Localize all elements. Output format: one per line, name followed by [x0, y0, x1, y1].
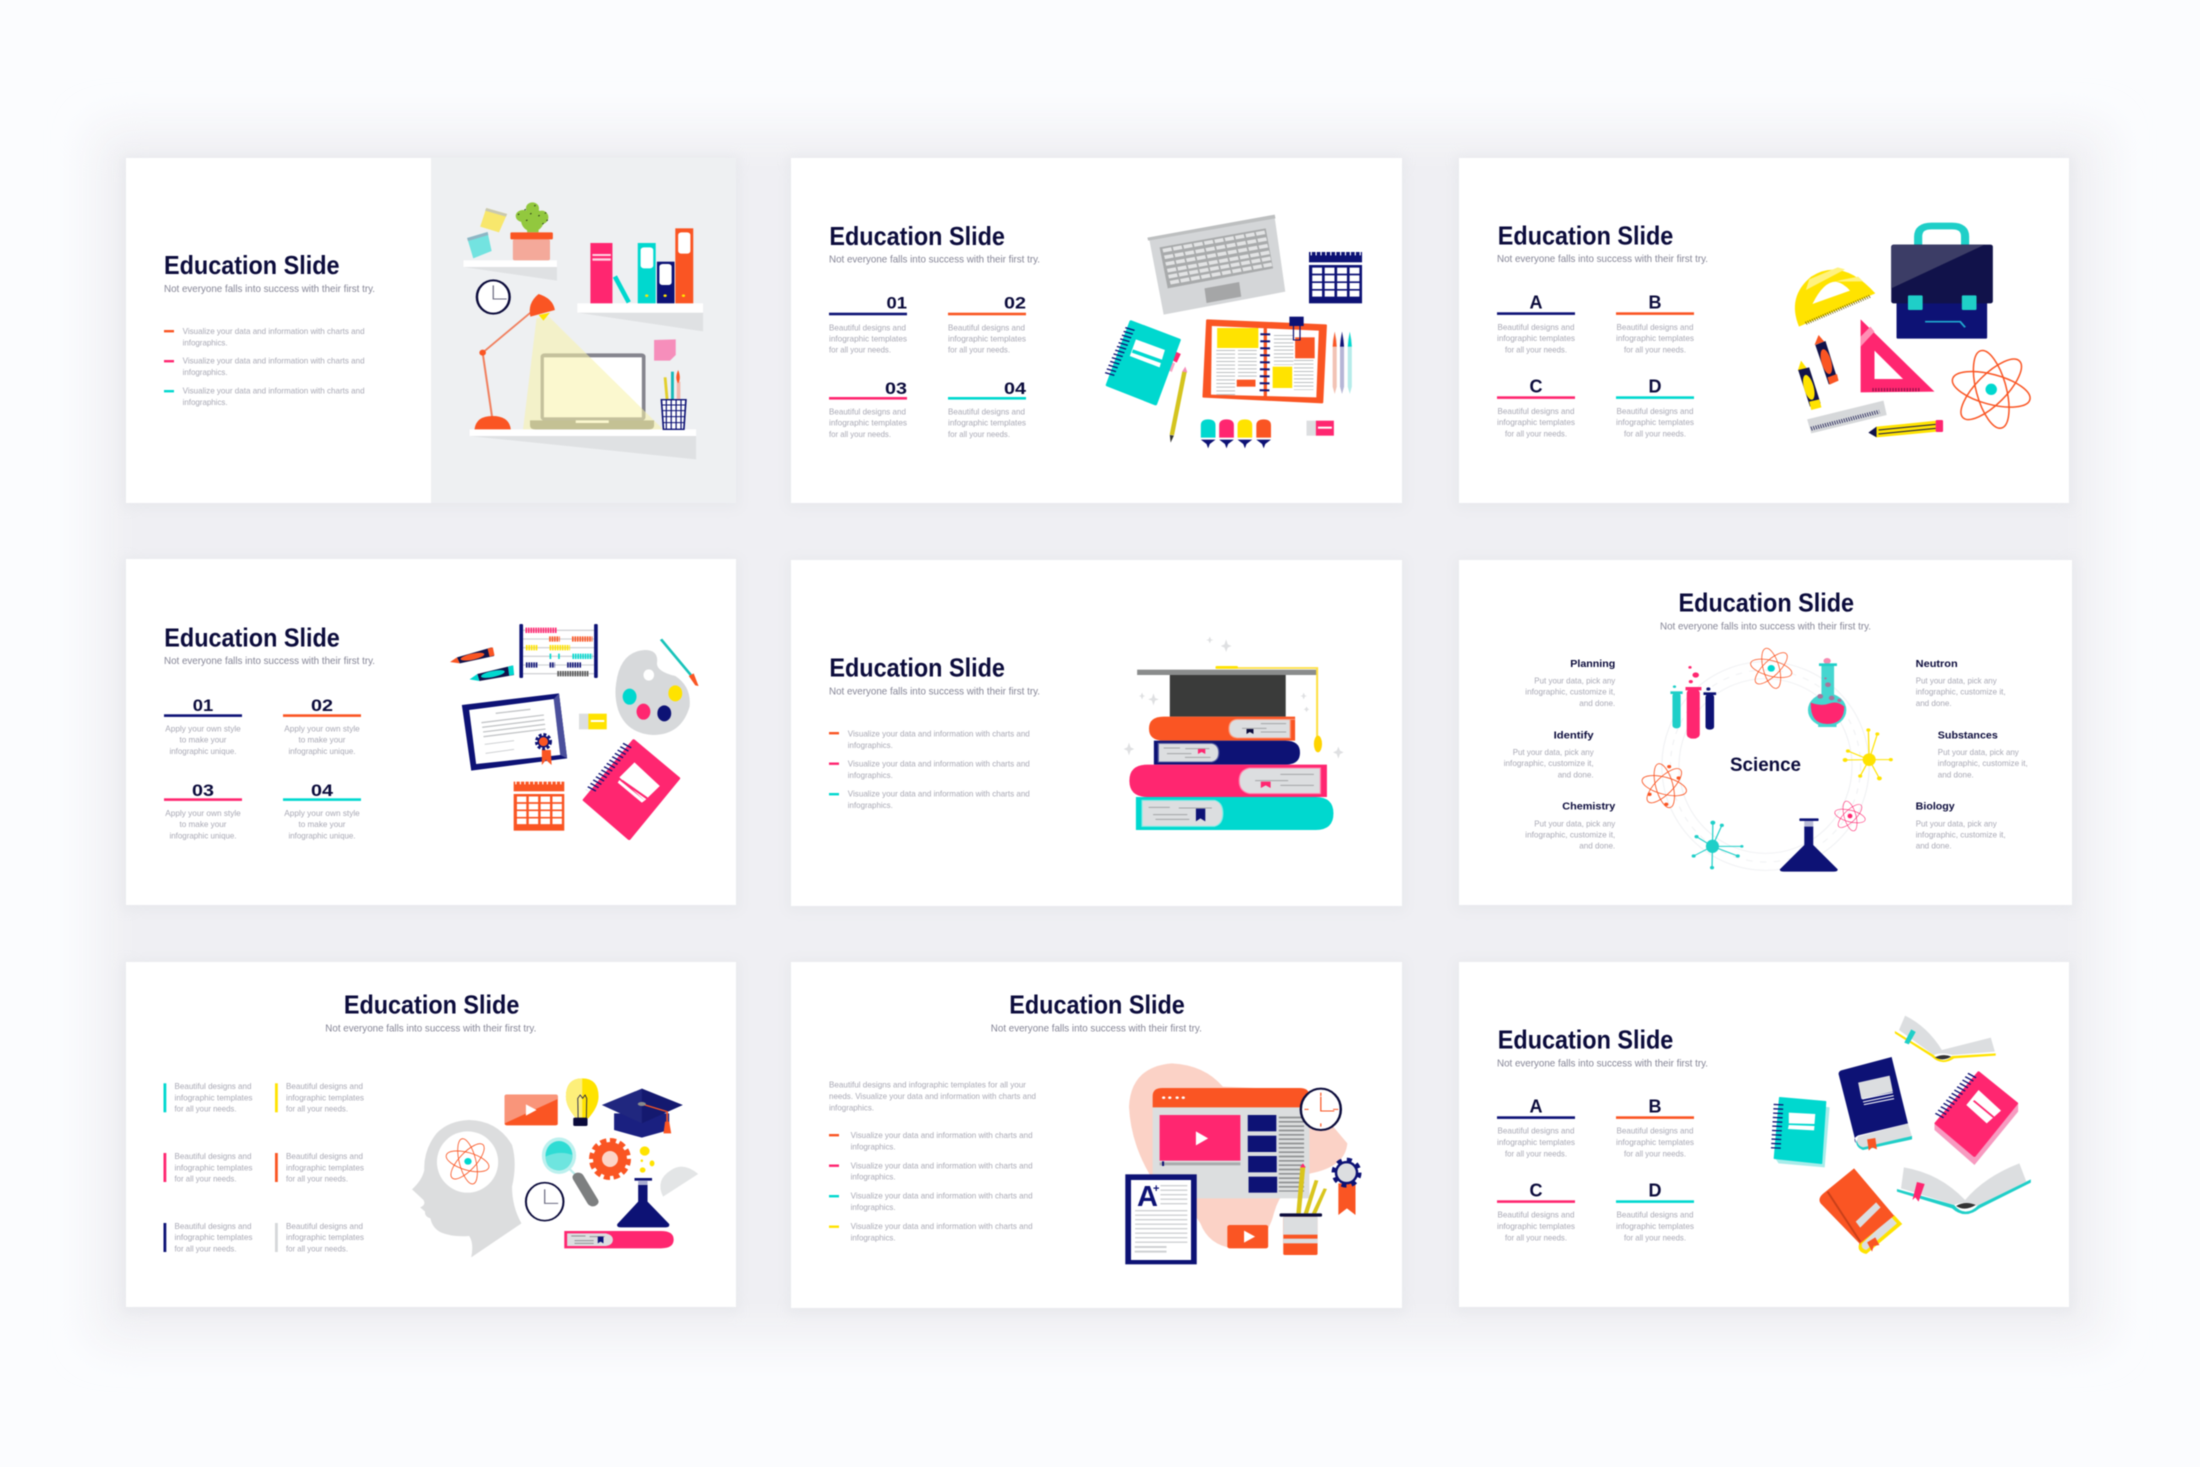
panel: slide 2 study desk	[791, 158, 1402, 503]
text blocks with colour bars: for all your needs.	[286, 1104, 348, 1114]
item 04	[283, 781, 361, 840]
item 02	[948, 293, 1026, 355]
icon: eraser	[1307, 421, 1334, 436]
bullet list: infographics.	[848, 800, 893, 810]
icon: calendar	[513, 782, 565, 831]
panel: slide 4 classroom items	[126, 559, 736, 905]
illustration: school bag and geometry tools	[1795, 226, 2034, 437]
text blocks with colour bars: for all your needs.	[174, 1104, 236, 1114]
item 02: Beautiful designs and	[948, 322, 1025, 332]
illustration: head with knowledge icons	[412, 1078, 698, 1257]
text blocks with colour bars: Beautiful designs and	[286, 1081, 363, 1091]
icon: orange atom with electrons	[1640, 762, 1689, 810]
subtitle: Not everyone falls into success with their first try.	[1660, 621, 1871, 633]
icon: pink atom	[1833, 800, 1867, 832]
icon: pencil cup	[1280, 1163, 1327, 1255]
subtitle: Not everyone falls into success with their first try.	[325, 1022, 536, 1034]
item A: Beautiful designs and	[1498, 1126, 1575, 1136]
bullet list	[829, 1130, 1033, 1242]
icon: protractor	[660, 1167, 698, 1197]
icon: clock	[1301, 1089, 1341, 1130]
item A: for all your needs.	[1505, 344, 1567, 354]
icon: eraser	[579, 714, 607, 729]
panel: slide 3 school bag	[1459, 158, 2069, 503]
title: Education Slide	[1498, 1024, 1673, 1054]
item 03: infographic unique.	[170, 830, 236, 840]
label: Chemistry: Put your data, pick any	[1534, 818, 1616, 828]
subtitle: Not everyone falls into success with their first try.	[991, 1022, 1202, 1034]
item 01: infographic templates	[829, 333, 907, 343]
text blocks with colour bars: infographic templates	[286, 1232, 364, 1242]
icon: conical flask	[617, 1178, 669, 1227]
label: Identify: Identify	[1554, 729, 1594, 741]
icon label: A plus: A	[1137, 1181, 1158, 1213]
item D	[1616, 376, 1694, 438]
panel: slide 6 science cycle	[1459, 560, 2072, 905]
item 04: 04	[1004, 379, 1027, 398]
icon: gear	[592, 1141, 628, 1177]
item C	[1497, 1180, 1575, 1242]
icon: light bulb	[566, 1078, 599, 1126]
bullet list: Visualize your data and information with charts and	[851, 1221, 1033, 1231]
item 01: to make your	[180, 735, 227, 745]
icon: crayons	[1798, 335, 1839, 410]
label: Neutron	[1916, 658, 2006, 708]
bullet list: infographics.	[851, 1141, 896, 1151]
item B: for all your needs.	[1624, 344, 1686, 354]
icon: graded paper A+	[1125, 1174, 1197, 1264]
item 02: 02	[1004, 293, 1026, 312]
icon: clock	[526, 1183, 563, 1221]
text blocks with colour bars: infographic templates	[286, 1092, 364, 1102]
item 01: Apply your own style	[165, 724, 241, 734]
text blocks with colour bars: Beautiful designs and	[286, 1151, 363, 1161]
label: Substances: Put your data, pick any	[1938, 747, 2020, 757]
icon: laptop	[530, 353, 654, 429]
subtitle: Not everyone falls into success with their first try.	[829, 686, 1040, 698]
item C: Beautiful designs and	[1498, 1210, 1575, 1220]
icon: highlighters	[1201, 419, 1271, 448]
item D: Beautiful designs and	[1616, 1210, 1694, 1220]
label: Substances: infographic, customize it,	[1938, 758, 2028, 768]
icon: ruler	[1807, 401, 1887, 433]
icon: paint palette	[615, 639, 699, 735]
item B: infographic templates	[1616, 333, 1694, 343]
title: Education Slide	[1009, 989, 1185, 1019]
label: Identify: and done.	[1558, 769, 1594, 779]
item 01: 01	[193, 696, 213, 715]
text blocks with colour bars: Beautiful designs and	[174, 1151, 252, 1161]
title: Education Slide	[829, 653, 1005, 683]
subtitle: Not everyone falls into success with their first try.	[164, 655, 375, 667]
item 03	[829, 379, 907, 439]
item 02: Apply your own style	[284, 724, 360, 734]
item D: for all your needs.	[1624, 1232, 1686, 1242]
item 04: Apply your own style	[284, 808, 360, 818]
item 01: 01	[886, 293, 907, 312]
item 03: 03	[192, 781, 214, 800]
item 04: for all your needs.	[948, 429, 1010, 439]
icon: teal notebook	[1774, 1098, 1830, 1167]
icon label: A plus: +	[1153, 1183, 1159, 1195]
icon: open book teal	[1897, 1163, 2031, 1214]
item C: C	[1530, 1180, 1542, 1200]
icon: open planner	[1204, 317, 1326, 402]
bullet list: infographics.	[851, 1232, 896, 1242]
icon: school bag	[1891, 226, 1993, 339]
icon: video button	[1227, 1225, 1268, 1248]
label: Neutron: Put your data, pick any	[1916, 676, 1997, 686]
icon: bubbles	[640, 1146, 654, 1173]
icon: desk lamp	[474, 294, 663, 429]
label: Neutron: and done.	[1916, 698, 1952, 708]
bullet list: Visualize your data and information with charts and	[851, 1160, 1033, 1170]
label: Substances: and done.	[1938, 769, 1974, 779]
item A: infographic templates	[1497, 1137, 1575, 1147]
item 04: infographic unique.	[288, 830, 356, 840]
label: Biology: Biology	[1916, 801, 1955, 813]
item 03	[164, 781, 242, 840]
label: Biology	[1916, 801, 2006, 851]
icon: conical flask	[1780, 818, 1838, 872]
item B	[1616, 292, 1694, 354]
bullet list: Visualize your data and information with charts and	[183, 356, 365, 366]
item B	[1616, 1096, 1694, 1158]
item D: for all your needs.	[1624, 428, 1686, 438]
label: Substances	[1938, 729, 2028, 779]
panel: slide 8 online learning	[791, 962, 1402, 1308]
icon: abacus	[519, 624, 598, 678]
bullet list: Visualize your data and information with charts and	[183, 386, 365, 396]
icon: atom top	[1749, 646, 1794, 690]
bullet list: infographics.	[851, 1202, 896, 1212]
label: Chemistry: and done.	[1579, 841, 1615, 851]
item 01: infographic unique.	[170, 746, 236, 756]
bullet list: infographics.	[848, 770, 893, 780]
icon: navy book	[1154, 741, 1300, 765]
item 01	[164, 696, 242, 756]
text blocks with colour bars: for all your needs.	[174, 1174, 236, 1184]
icon: video card	[505, 1095, 558, 1125]
item B: Beautiful designs and	[1616, 322, 1694, 332]
panel: slide 7 head and ideas	[126, 962, 736, 1307]
item D: D	[1648, 1180, 1662, 1200]
icon: open book yellow	[1895, 1016, 1996, 1062]
icon: teal molecule	[1692, 821, 1743, 869]
illustration: scattered books	[1774, 1016, 2031, 1254]
illustration: book stack with graduation cap	[1124, 637, 1344, 830]
bullet list: Visualize your data and information with charts and	[848, 729, 1030, 739]
label: Neutron: infographic, customize it,	[1916, 687, 2006, 697]
bullet list: infographics.	[183, 397, 228, 407]
icon: crayons	[450, 647, 514, 681]
item 02	[283, 696, 361, 756]
item C: infographic templates	[1497, 1221, 1575, 1231]
icon: round flask	[1808, 658, 1846, 727]
item 03: Apply your own style	[165, 808, 241, 818]
title: Education Slide	[164, 622, 340, 652]
label: Planning: Planning	[1570, 658, 1615, 670]
bullet list: Visualize your data and information with charts and	[848, 759, 1030, 769]
item A: infographic templates	[1497, 333, 1575, 343]
icon: award ribbon	[1334, 1160, 1360, 1215]
item 04	[948, 379, 1027, 439]
item 02: infographic templates	[948, 333, 1026, 343]
icon: navy book	[1839, 1057, 1912, 1151]
icon: atom	[1949, 347, 2034, 432]
intro paragraph: infographics.	[829, 1102, 874, 1112]
item 04: infographic templates	[948, 418, 1026, 428]
bullet list: Visualize your data and information with charts and	[851, 1130, 1033, 1140]
item 01	[829, 293, 907, 355]
item 02: to make your	[298, 735, 346, 745]
icon: pencil cup	[661, 370, 686, 429]
item B: B	[1648, 1096, 1662, 1116]
text blocks with colour bars: Beautiful designs and	[174, 1221, 252, 1231]
icon: yellow molecule	[1843, 728, 1893, 780]
text blocks with colour bars: infographic templates	[174, 1092, 252, 1102]
label: Biology: and done.	[1916, 841, 1952, 851]
icon: pink notebook	[1934, 1072, 2018, 1165]
subtitle: Not everyone falls into success with their first try.	[164, 283, 375, 295]
ring	[1662, 662, 1869, 870]
item 01: for all your needs.	[829, 345, 891, 355]
text blocks with colour bars: for all your needs.	[286, 1243, 348, 1253]
item 03: for all your needs.	[829, 429, 891, 439]
text blocks with colour bars: Beautiful designs and	[174, 1081, 252, 1091]
illustration: video lessons	[1125, 1063, 1360, 1264]
text blocks with colour bars: for all your needs.	[174, 1243, 236, 1253]
icon: set square	[1861, 319, 1934, 392]
icon: browser window	[1153, 1088, 1309, 1198]
text blocks with colour bars: infographic templates	[174, 1232, 252, 1242]
item A: for all your needs.	[1505, 1148, 1567, 1158]
centre label: Science	[1730, 754, 1801, 776]
icon: top shelf with plant and notes	[463, 202, 557, 281]
intro paragraph	[829, 1080, 1036, 1112]
icon: calendar	[1308, 252, 1363, 303]
item 03: 03	[885, 379, 907, 398]
icon: orange book	[1819, 1168, 1902, 1254]
icon: framed certificate	[462, 693, 567, 771]
title: Education Slide	[829, 221, 1005, 251]
item B: B	[1648, 292, 1662, 312]
icon: sticky note	[654, 339, 676, 361]
bullet list: infographics.	[183, 337, 228, 347]
item D: infographic templates	[1616, 417, 1694, 427]
subtitle: Not everyone falls into success with their first try.	[1497, 1057, 1708, 1069]
bullet list: Visualize your data and information with charts and	[851, 1191, 1033, 1201]
item C: C	[1530, 376, 1542, 396]
label: Identify: Put your data, pick any	[1513, 747, 1594, 757]
icon: binders on shelf	[577, 228, 703, 331]
label: Planning	[1525, 658, 1616, 708]
bullet list: Visualize your data and information with charts and	[183, 326, 365, 336]
item A	[1497, 292, 1575, 354]
icon: protractor	[1795, 267, 1875, 327]
label: Planning: and done.	[1579, 698, 1615, 708]
item A: A	[1530, 1096, 1542, 1116]
item B: Beautiful designs and	[1616, 1126, 1694, 1136]
item 04: to make your	[298, 819, 346, 829]
label: Neutron: Neutron	[1916, 658, 1958, 670]
item 03: Beautiful designs and	[829, 407, 906, 417]
label: Chemistry: Chemistry	[1562, 801, 1615, 813]
label: Chemistry	[1525, 801, 1616, 851]
bullet list: infographics.	[851, 1172, 896, 1182]
icon: book	[564, 1231, 674, 1248]
icon: test tubes	[1670, 666, 1716, 739]
bullet list	[164, 326, 365, 407]
icon: pink book	[1129, 765, 1327, 797]
icon: teal notebook	[1107, 322, 1181, 404]
item 03: to make your	[180, 819, 227, 829]
icon: pencil	[1868, 420, 1943, 437]
illustration: laptop, planner and stationery	[1107, 215, 1363, 448]
background blob	[1129, 1063, 1347, 1248]
icon: pens	[1333, 332, 1352, 394]
item C: for all your needs.	[1505, 1232, 1567, 1242]
item 02: 02	[311, 696, 333, 715]
label: Substances: Substances	[1938, 729, 1998, 741]
icon: magnifying glass	[542, 1137, 593, 1202]
panel: slide 5 books and graduation cap	[791, 560, 1402, 906]
item D: Beautiful designs and	[1616, 406, 1694, 416]
item B: infographic templates	[1616, 1137, 1694, 1147]
intro paragraph: needs. Visualize your data and information with charts and	[829, 1091, 1036, 1101]
icon: graduation cap	[602, 1089, 683, 1138]
text blocks with colour bars: Beautiful designs and	[286, 1221, 363, 1231]
icon: bottom shelf	[470, 429, 696, 459]
title: Education Slide	[1498, 220, 1673, 250]
subtitle: Not everyone falls into success with their first try.	[1497, 253, 1708, 265]
item C	[1497, 376, 1575, 438]
item 04: Beautiful designs and	[948, 407, 1025, 417]
item 02: for all your needs.	[948, 345, 1010, 355]
item D: infographic templates	[1616, 1221, 1694, 1231]
icon: orange book	[1149, 717, 1295, 741]
bullet list: Visualize your data and information with charts and	[848, 789, 1030, 799]
bullet list: infographics.	[183, 367, 228, 377]
item D: D	[1648, 376, 1662, 396]
subtitle: Not everyone falls into success with their first try.	[829, 253, 1040, 265]
label: Planning: Put your data, pick any	[1534, 676, 1616, 686]
icon: pencil	[1170, 367, 1187, 443]
item 04: 04	[311, 781, 334, 800]
bullet list	[829, 729, 1030, 810]
text blocks with colour bars: infographic templates	[286, 1162, 364, 1172]
title: Education Slide	[1679, 587, 1854, 617]
icon: wall clock	[477, 280, 510, 314]
illustration: desk with lamp, laptop and shelves	[463, 202, 703, 459]
item 02: infographic unique.	[288, 746, 356, 756]
item 03: infographic templates	[829, 418, 907, 428]
label: Planning: infographic, customize it,	[1525, 687, 1615, 697]
title: Education Slide	[344, 989, 519, 1019]
icon: sparkles	[1124, 637, 1344, 759]
icon: pink notebook	[584, 741, 679, 839]
icon: graduation cap	[1137, 666, 1322, 752]
text blocks with colour bars: infographic templates	[174, 1162, 252, 1172]
item C: for all your needs.	[1505, 428, 1567, 438]
illustration: abacus, palette, certificate and notebook	[450, 624, 699, 839]
item A	[1497, 1096, 1575, 1158]
item A: Beautiful designs and	[1498, 322, 1575, 332]
item 01: Beautiful designs and	[829, 322, 906, 332]
label: Identify: infographic, customize it,	[1504, 758, 1594, 768]
item A: A	[1530, 292, 1542, 312]
icon: teal book	[1136, 797, 1333, 830]
panel: slide 9 books	[1459, 962, 2069, 1307]
icon: laptop keyboard	[1147, 215, 1285, 315]
item C: infographic templates	[1497, 417, 1575, 427]
title: Education Slide	[164, 250, 340, 280]
intro paragraph: Beautiful designs and infographic templates for all your	[829, 1080, 1026, 1090]
label: Identify	[1504, 729, 1594, 779]
icon: head silhouette	[412, 1120, 521, 1257]
item B: for all your needs.	[1624, 1148, 1686, 1158]
label: Biology: Put your data, pick any	[1916, 818, 1997, 828]
item D	[1616, 1180, 1694, 1242]
label: Chemistry: infographic, customize it,	[1525, 829, 1615, 839]
bullet list: infographics.	[848, 740, 893, 750]
text blocks with colour bars: for all your needs.	[286, 1174, 348, 1184]
diagram: ring of science icons	[1640, 646, 1893, 872]
item C: Beautiful designs and	[1498, 406, 1575, 416]
text blocks with colour bars	[164, 1081, 364, 1253]
panel: slide 1 desk shelves	[126, 158, 736, 503]
label: Biology: infographic, customize it,	[1916, 829, 2006, 839]
